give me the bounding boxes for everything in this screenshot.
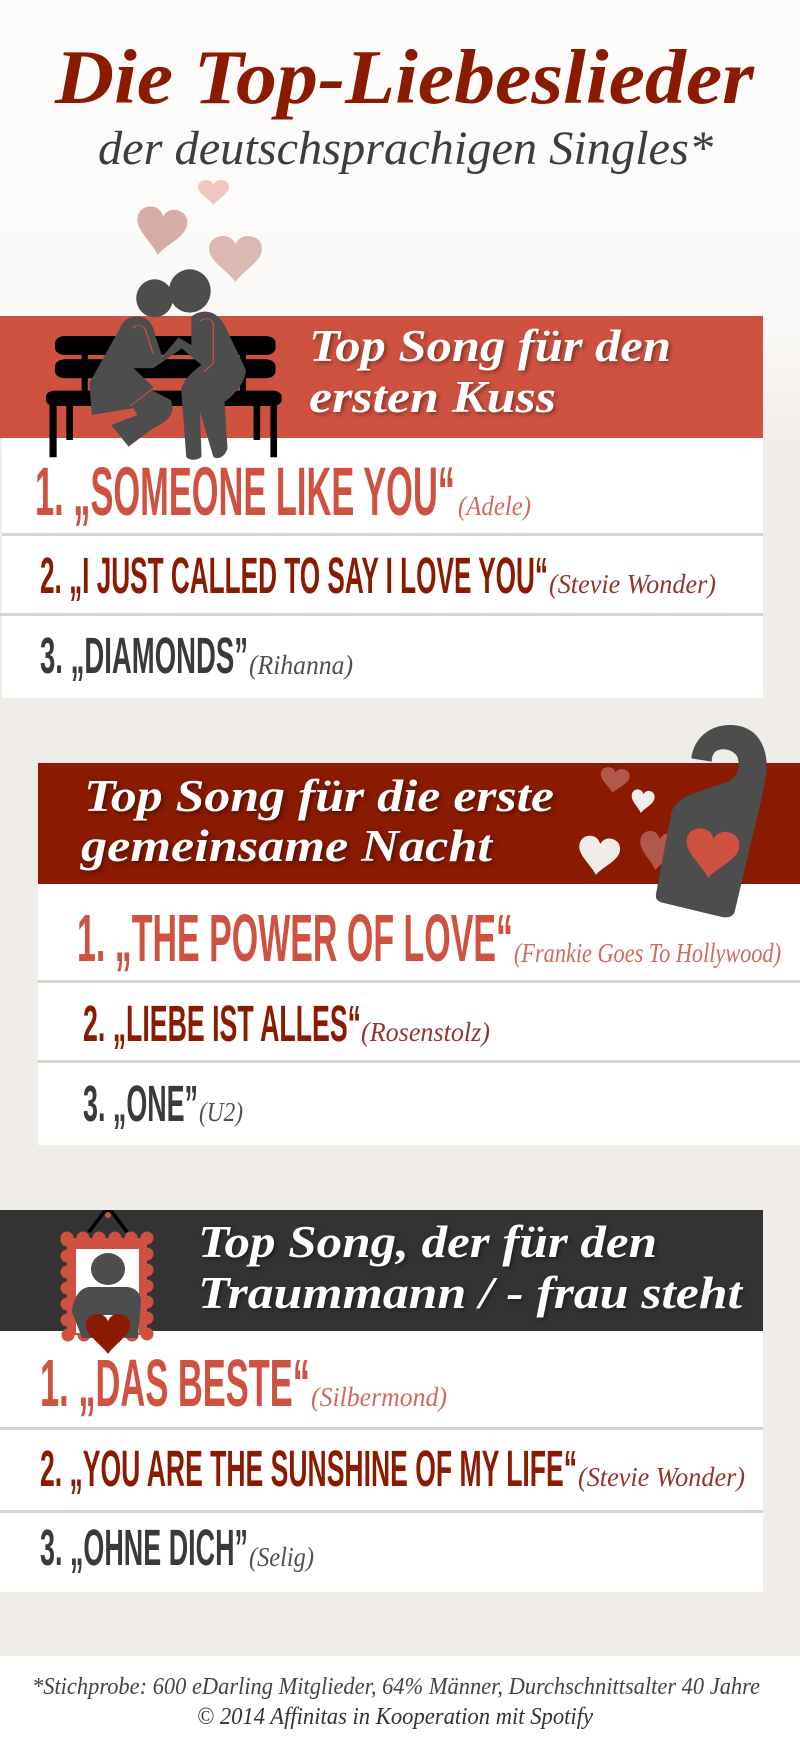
song 3: Diamonds: (Rihanna) (249, 650, 353, 680)
song 3: One: (U2) (199, 1097, 243, 1127)
song 3: Ohne Dich (40, 1519, 314, 1576)
song 2: I Just Called To Say I Love You: (Stevie Wonder) (549, 569, 716, 599)
panel: erster Kuss (0, 180, 763, 698)
header band (38, 763, 800, 884)
white list background (38, 884, 800, 1145)
heading: Traummann (198, 1217, 744, 1318)
song 2: You Are The Sunshine Of My Life: (Stevie Wonder) (578, 1462, 745, 1492)
heading: erster Kuss: Top Song für den (309, 321, 671, 371)
heading: erste Nacht: Top Song für die erste (84, 771, 554, 821)
song 1: Someone Like You: (Adele) (458, 491, 531, 521)
song 1: Das Beste: (Silbermond) (311, 1382, 447, 1412)
song 3: Diamonds: 3. „DIAMONDS” (40, 627, 248, 684)
icon: couple on a bench with hearts (46, 180, 282, 460)
song 3: Ohne Dich: 3. „OHNE DICH” (40, 1519, 248, 1576)
song 3: One: 3. „ONE” (83, 1075, 198, 1132)
heading: erster Kuss: ersten Kuss (309, 372, 556, 422)
title: Die Top-Liebeslieder (54, 34, 755, 120)
icon: framed portrait with heart (67, 1212, 147, 1354)
song 2: Liebe ist alles: (Rosenstolz) (361, 1017, 490, 1047)
heading: Traummann: Traummann / - frau steht (198, 1268, 744, 1318)
song 1: Das Beste: 1. „DAS BESTE“ (40, 1346, 310, 1421)
heading: erster Kuss (309, 321, 671, 422)
heading: Traummann: Top Song, der für den (198, 1217, 657, 1267)
header band (0, 1210, 763, 1331)
footer (0, 1656, 800, 1750)
white list background (2, 438, 763, 698)
footer: *Stichprobe: 600 eDarling Mitglieder, 64% Männer, Durchschnittsalter 40 Jahre (32, 1674, 760, 1700)
heading: erste Nacht (80, 771, 554, 871)
footer: © 2014 Affinitas in Kooperation mit Spotify (197, 1704, 593, 1730)
song 1: Someone Like You (35, 453, 531, 530)
panel: Traummann / -frau (0, 1210, 763, 1592)
header band (0, 316, 763, 438)
panel: erste gemeinsame Nacht (38, 725, 800, 1145)
subtitle: der deutschsprachigen Singles* (98, 122, 713, 175)
white list background (0, 1331, 763, 1592)
song 2: Liebe ist alles: 2. „LIEBE IST ALLES“ (83, 995, 361, 1052)
song 3: Ohne Dich: (Selig) (249, 1542, 314, 1572)
heading: erste Nacht: gemeinsame Nacht (80, 821, 494, 871)
icon: door hanger with hearts (576, 725, 767, 917)
